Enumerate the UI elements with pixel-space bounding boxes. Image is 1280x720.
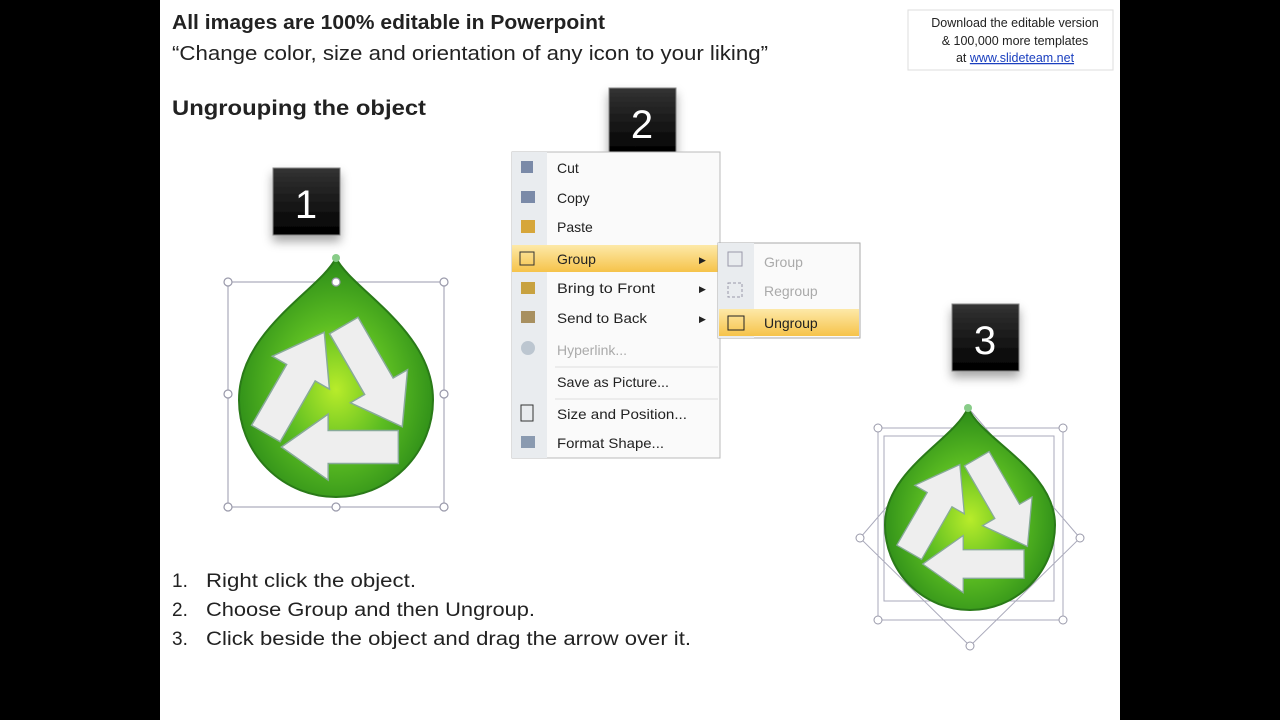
context menu: Copy bbox=[557, 190, 590, 206]
download note bbox=[908, 10, 1113, 70]
step box 1: 1 bbox=[295, 183, 317, 227]
step box 2 bbox=[609, 88, 676, 155]
heading: Ungrouping the object bbox=[172, 97, 426, 120]
context menu: Format Shape... bbox=[557, 435, 664, 451]
context menu: Group bbox=[557, 251, 596, 267]
drop 1 with selection bbox=[224, 254, 448, 511]
context menu: Paste bbox=[557, 219, 593, 235]
slide background bbox=[160, 0, 1120, 720]
instructions: 3. bbox=[172, 629, 188, 650]
instructions: Click beside the object and drag the arrow over it. bbox=[206, 629, 691, 650]
download note: at www.slideteam.net bbox=[956, 51, 1075, 65]
step box 3 bbox=[952, 304, 1019, 371]
instructions: Choose Group and then Ungroup. bbox=[206, 600, 535, 621]
context menu bbox=[512, 152, 720, 458]
step box 1 bbox=[273, 168, 340, 235]
submenu bbox=[718, 243, 860, 338]
download note: & 100,000 more templates bbox=[942, 34, 1088, 48]
context menu: Cut bbox=[557, 160, 579, 176]
instructions: 2. bbox=[172, 600, 188, 621]
step box 2: 2 bbox=[631, 103, 653, 147]
context menu: Size and Position... bbox=[557, 406, 687, 422]
context menu: Bring to Front bbox=[557, 280, 655, 296]
context menu: Hyperlink... bbox=[557, 342, 627, 358]
step box 3: 3 bbox=[974, 319, 996, 363]
context menu: Save as Picture... bbox=[557, 374, 669, 390]
title bbox=[172, 12, 768, 65]
submenu: Regroup bbox=[764, 283, 818, 299]
submenu: Group bbox=[764, 254, 803, 270]
context menu: ▶ bbox=[699, 284, 706, 294]
download note: Download the editable version bbox=[931, 16, 1099, 30]
context menu: ▶ bbox=[699, 255, 706, 265]
instructions: 1. bbox=[172, 571, 188, 592]
context menu: Send to Back bbox=[557, 310, 648, 326]
instructions: Right click the object. bbox=[206, 571, 416, 592]
drop 3 ungrouped with selections bbox=[856, 404, 1084, 650]
instructions bbox=[172, 571, 691, 650]
submenu: Ungroup bbox=[764, 315, 818, 331]
title: All images are 100% editable in Powerpoint bbox=[172, 12, 605, 34]
title: “Change color, size and orientation of any icon to your liking” bbox=[172, 43, 768, 65]
context menu: ▶ bbox=[699, 314, 706, 324]
